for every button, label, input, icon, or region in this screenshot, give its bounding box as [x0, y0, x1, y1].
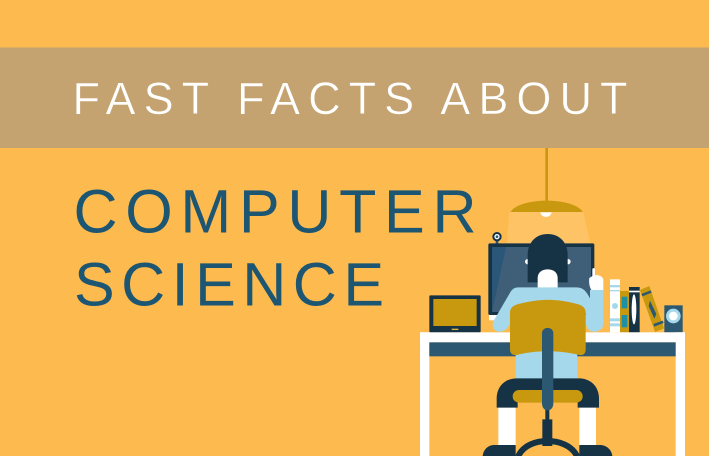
icon: laptop [429, 295, 481, 332]
title band [0, 48, 709, 148]
hand [589, 268, 603, 290]
person [493, 234, 603, 380]
icon: computer monitor [488, 243, 594, 320]
icon: books and speaker [610, 279, 683, 332]
desk [420, 332, 685, 456]
torso and arms [493, 287, 603, 332]
lower post [542, 408, 552, 446]
heading: computer: COMPUTER [74, 178, 476, 246]
icon: ceiling lamp [507, 148, 591, 245]
chair back [510, 300, 586, 355]
hair [528, 234, 568, 282]
seat arch [497, 378, 599, 408]
legs [516, 350, 577, 380]
illustration: person at desk [420, 148, 685, 456]
chair post [542, 328, 553, 410]
chair base [518, 441, 577, 456]
right shin [579, 407, 596, 446]
seat cushion [513, 390, 583, 403]
icon: webcam [492, 232, 502, 244]
shins [498, 407, 516, 446]
ears [525, 259, 530, 264]
right shoe [579, 445, 612, 456]
shoes [483, 445, 516, 456]
right ear [565, 259, 571, 264]
heading: fast facts about: FAST FACTS ABOUT [72, 73, 628, 124]
heading: science: SCIENCE [74, 250, 384, 318]
neck [538, 269, 558, 289]
office chair [483, 300, 612, 456]
